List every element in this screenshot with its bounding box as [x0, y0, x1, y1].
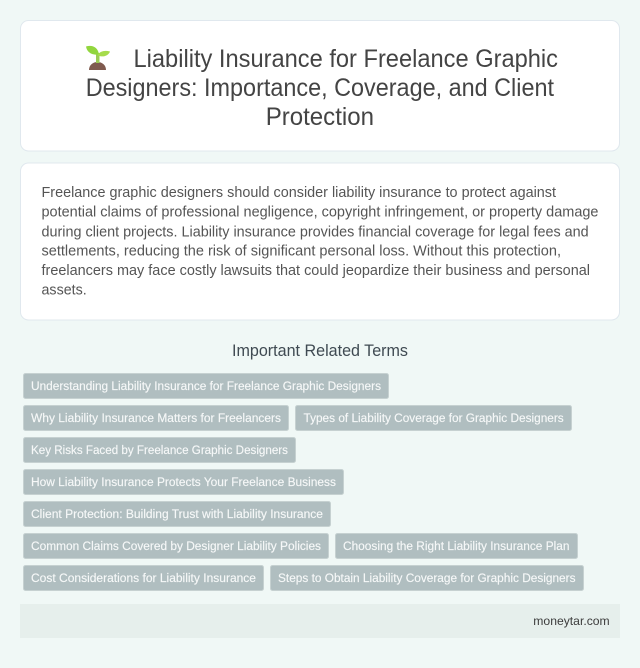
tag: understanding liability insurance	[24, 374, 388, 398]
description text: potential claims of professional negligence, copyright infringement, or property damage	[42, 205, 598, 221]
tag: choosing the right plan	[336, 534, 578, 558]
panel: title card	[20, 20, 620, 151]
description text: assets.	[42, 282, 87, 298]
tag: why liability insurance matters: Why Liability Insurance Matters for Freelancers	[31, 411, 281, 425]
tag: steps to obtain coverage: Steps to Obtain Liability Coverage for Graphic Designers	[278, 571, 576, 585]
tag: types of liability coverage	[296, 406, 572, 430]
tag: choosing the right plan: Choosing the Right Liability Insurance Plan	[343, 539, 570, 553]
tag: common claims: Common Claims Covered by Designer Liability Policies	[31, 539, 321, 553]
description text: during client projects. Liability insurance provides financial coverage for legal fees and	[42, 224, 589, 240]
description text	[42, 185, 598, 298]
tag: client protection	[24, 502, 330, 526]
icon: sprout	[86, 46, 110, 70]
description text: settlements, reducing the risk of significant personal loss. Without this protection,	[42, 244, 561, 260]
description text: Freelance graphic designers should consider liability insurance to protect against	[42, 185, 556, 201]
tag: why liability insurance matters	[24, 406, 288, 430]
tag: common claims	[24, 534, 328, 558]
footer source: moneytar.com	[533, 614, 610, 628]
tag: how liability insurance protects: How Liability Insurance Protects Your Freelance Business	[31, 475, 336, 489]
description text: freelancers may face costly lawsuits that could jeopardize their business and personal	[42, 263, 590, 279]
panel: description card	[20, 163, 620, 320]
heading: important related terms: Important Related Terms	[232, 342, 408, 360]
tag list	[24, 374, 584, 590]
title text: Liability Insurance for Freelance Graphic	[134, 45, 558, 73]
title text	[86, 45, 558, 131]
title text: Protection	[266, 103, 374, 131]
tag: types of liability coverage: Types of Liability Coverage for Graphic Designers	[304, 411, 564, 425]
footer	[20, 604, 620, 638]
tag: key risks: Key Risks Faced by Freelance Graphic Designers	[31, 443, 288, 457]
title text: Designers: Importance, Coverage, and Client	[86, 74, 554, 102]
tag: understanding liability insurance: Understanding Liability Insurance for Freelance Graphic Designers	[31, 379, 381, 393]
tag: client protection: Client Protection: Building Trust with Liability Insurance	[31, 507, 323, 521]
tag: how liability insurance protects	[24, 470, 344, 494]
tag: steps to obtain coverage	[270, 566, 584, 590]
tag: cost considerations	[24, 566, 264, 590]
tag: cost considerations: Cost Considerations for Liability Insurance	[31, 571, 256, 585]
tag: key risks	[24, 438, 296, 462]
